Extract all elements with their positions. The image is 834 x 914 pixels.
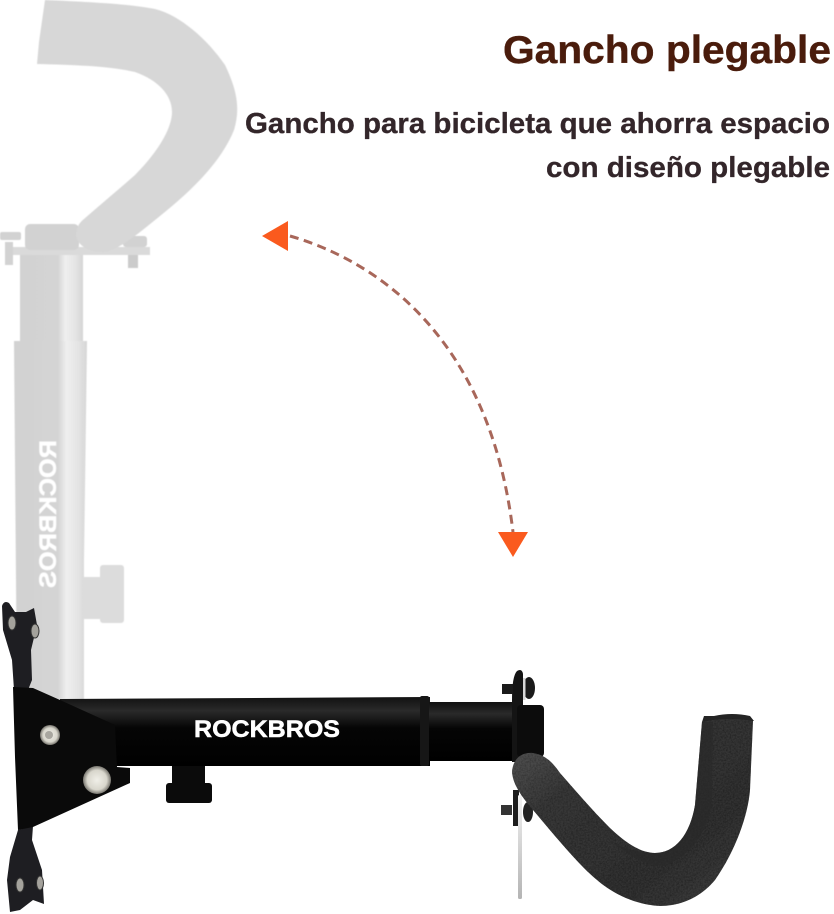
- ghost hook: [37, 0, 237, 252]
- arrowhead down: [498, 532, 528, 557]
- hook end cap: [702, 714, 754, 722]
- dashed arc: [290, 236, 513, 532]
- small nut: [40, 725, 60, 745]
- wall bracket and arm: [2, 602, 514, 912]
- subtitle: Gancho para bicicleta que ahorra espacio: [245, 108, 830, 140]
- subtitle: con diseño plegable: [546, 152, 830, 184]
- ghost post upper: [20, 254, 83, 342]
- arm inner tube: [428, 702, 514, 761]
- ghost knob: [84, 565, 124, 623]
- top bolts: [502, 677, 535, 700]
- ghost clamp: [0, 224, 150, 268]
- ghost post lower: [14, 341, 87, 700]
- adjustment knob: [166, 766, 212, 803]
- mount block: [517, 705, 544, 757]
- arrowhead up-left: [262, 221, 288, 251]
- lower bolts and clip: [501, 790, 533, 899]
- title: Gancho plegable: [503, 29, 831, 72]
- bracket triangle: [13, 687, 130, 830]
- flange screws: [8, 616, 44, 892]
- subtitle: [245, 108, 830, 184]
- mount plate: [512, 670, 523, 762]
- large bolt: [83, 766, 111, 794]
- arm tube: [60, 697, 430, 766]
- bottom flange: [7, 826, 44, 912]
- faded folded-up hook position: [0, 0, 237, 700]
- hook body: [512, 719, 753, 906]
- hook mount plate: [501, 670, 544, 899]
- top flange: [2, 602, 37, 690]
- hook inner shadow: [610, 722, 713, 866]
- arm collar: [420, 696, 429, 766]
- arm brand text: ROCKBROS: [194, 716, 340, 743]
- ghost brand mark: ROCKBROS: [35, 440, 62, 588]
- arrow: folding arc: [262, 221, 528, 557]
- folding hook: [512, 714, 754, 906]
